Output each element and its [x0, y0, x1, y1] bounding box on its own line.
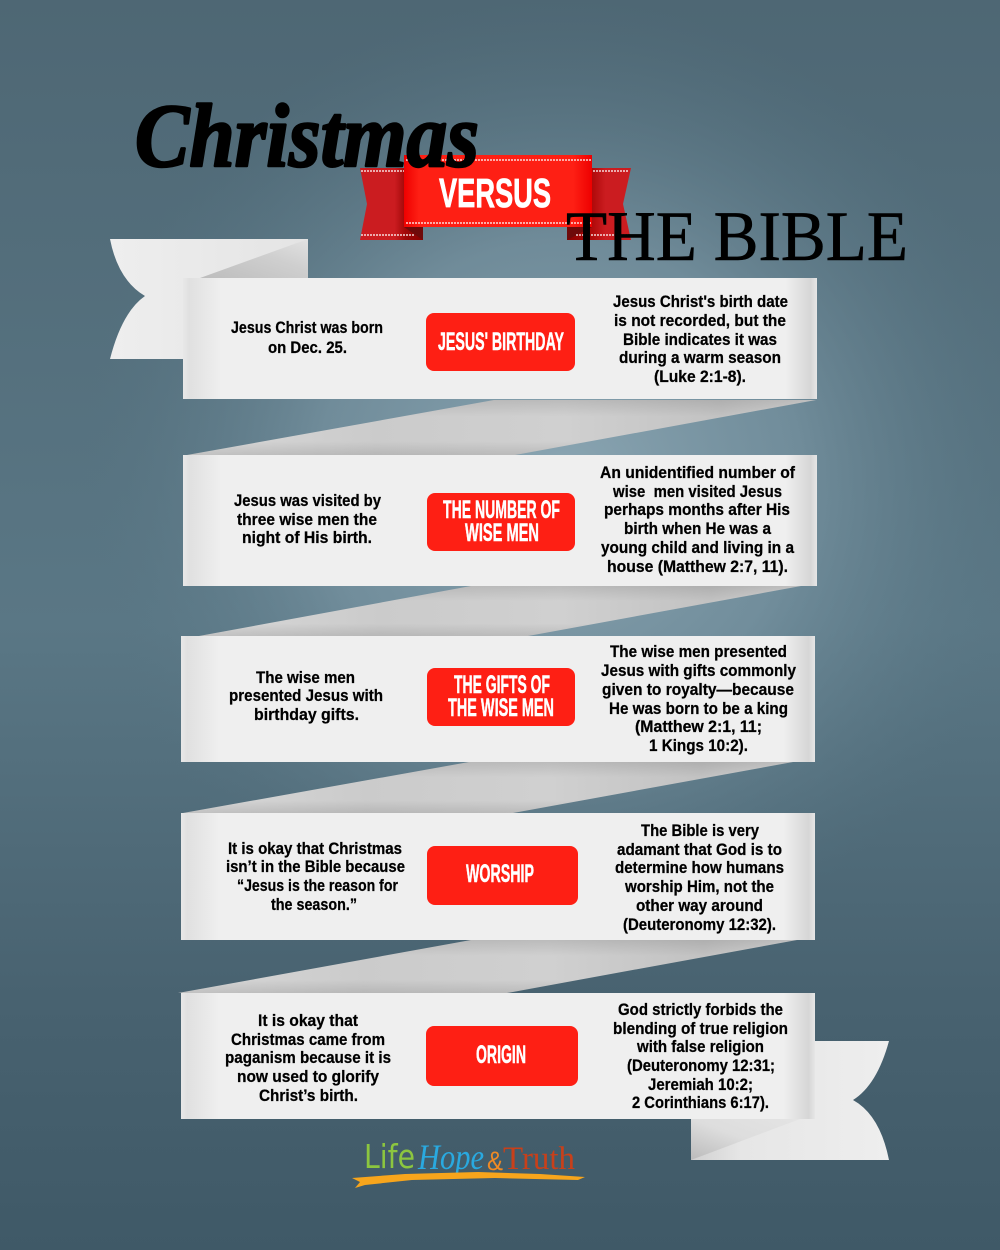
label box: JESUS' BIRTHDAY — [438, 328, 564, 356]
bible text: other way around — [636, 897, 763, 915]
logo: Life Hope & Truth — [352, 1137, 585, 1188]
label box — [426, 313, 575, 371]
ribbon end: bottom right tail — [691, 1041, 889, 1160]
bible text: during a warm season — [619, 349, 781, 367]
claim text: on Dec. 25. — [268, 339, 347, 357]
connector fold 4 — [178, 940, 797, 993]
label box — [426, 1026, 578, 1086]
bible text — [613, 293, 788, 386]
bible text: house (Matthew 2:7, 11). — [607, 558, 788, 576]
bible text — [615, 822, 784, 934]
bible text: Jesus with gifts commonly — [601, 662, 797, 680]
logo wordmark: & — [487, 1146, 503, 1176]
bible text — [600, 464, 795, 576]
claim text: Jesus was visited by — [234, 492, 382, 510]
claim text — [231, 319, 383, 357]
panel: Jesus' birthday — [183, 278, 817, 399]
bible text: 1 Kings 10:2). — [649, 737, 748, 755]
claim text: The wise men — [256, 669, 355, 687]
bible text: with false religion — [636, 1038, 764, 1056]
connector fold 2 — [199, 586, 801, 636]
bible text: young child and living in a — [601, 539, 795, 557]
claim text: birthday gifts. — [254, 706, 359, 724]
ribbon right tail — [567, 168, 631, 240]
bible text — [613, 1001, 788, 1112]
label box: WISE MEN — [465, 519, 539, 547]
bible text: adamant that God is to — [617, 841, 782, 859]
label box: THE WISE MEN — [448, 694, 554, 722]
logo wordmark: Hope — [417, 1137, 484, 1177]
bible text: God strictly forbids the — [618, 1001, 783, 1019]
bible text: The Bible is very — [641, 822, 760, 840]
bible text: He was born to be a king — [609, 700, 788, 718]
bible text: given to royalty—because — [602, 681, 794, 699]
ribbon left tail — [360, 168, 423, 240]
logo brush stroke — [352, 1172, 585, 1188]
bible text: 2 Corinthians 6:17). — [632, 1094, 769, 1112]
claim text — [226, 840, 405, 914]
bible text: Jeremiah 10:2; — [648, 1076, 753, 1094]
panel: worship — [181, 813, 815, 940]
bible text: perhaps months after His — [604, 501, 790, 519]
bible text: blending of true religion — [613, 1020, 788, 1038]
bible text: wise men visited Jesus — [612, 483, 782, 501]
bible text — [601, 643, 797, 755]
title: The Bible: THE BIBLE — [566, 198, 908, 276]
claim text: isn’t in the Bible because — [226, 858, 405, 876]
label box: THE GIFTS OF — [454, 671, 550, 699]
ribbon banner: versus — [360, 155, 631, 240]
panel: origin — [181, 993, 815, 1119]
ribbon end: top left tail — [110, 239, 308, 359]
claim text — [234, 492, 382, 547]
label box: WORSHIP — [466, 860, 534, 888]
claim text: presented Jesus with — [229, 687, 383, 705]
ribbon centre — [404, 155, 592, 227]
panel: gifts of the wise men — [181, 636, 815, 762]
logo wordmark: Life — [364, 1137, 415, 1176]
bible text: An unidentified number of — [600, 464, 795, 482]
connector fold 1 — [187, 400, 816, 455]
claim text — [229, 669, 383, 724]
bible text: (Luke 2:1-8). — [654, 368, 746, 386]
claim text: It is okay that Christmas — [228, 840, 402, 858]
bible text: (Matthew 2:1, 11; — [635, 718, 762, 736]
claim text: paganism because it is — [225, 1049, 391, 1067]
claim text — [225, 1012, 391, 1105]
bible text: is not recorded, but the — [614, 312, 786, 330]
claim text: night of His birth. — [242, 529, 372, 547]
bible text: The wise men presented — [610, 643, 787, 661]
bible text: worship Him, not the — [624, 878, 774, 896]
label box — [427, 493, 575, 551]
bible text: (Deuteronomy 12:31; — [627, 1057, 775, 1075]
bible text: Jesus Christ's birth date — [613, 293, 788, 311]
claim text: It is okay that — [258, 1012, 358, 1030]
logo wordmark: Truth — [503, 1141, 575, 1177]
claim text: the season.” — [271, 896, 357, 914]
title: Christmas: Christmas — [135, 87, 479, 186]
claim text: Christmas came from — [231, 1031, 385, 1049]
panel: number of wise men — [183, 455, 817, 586]
connector fold 3 — [183, 762, 793, 813]
bible text: Bible indicates it was — [623, 331, 777, 349]
claim text: three wise men the — [237, 511, 377, 529]
label box — [427, 846, 578, 905]
bible text: (Deuteronomy 12:32). — [623, 916, 776, 934]
label box: ORIGIN — [476, 1041, 526, 1069]
label box — [427, 668, 575, 726]
claim text: “Jesus is the reason for — [237, 877, 398, 895]
bible text: birth when He was a — [624, 520, 772, 538]
ribbon label: versus: VERSUS — [439, 170, 551, 216]
bible text: determine how humans — [615, 859, 784, 877]
logo wordmark — [364, 1137, 575, 1177]
claim text: Jesus Christ was born — [231, 319, 383, 337]
claim text: now used to glorify — [237, 1068, 380, 1086]
label box: THE NUMBER OF — [443, 496, 560, 524]
claim text: Christ’s birth. — [259, 1087, 358, 1105]
